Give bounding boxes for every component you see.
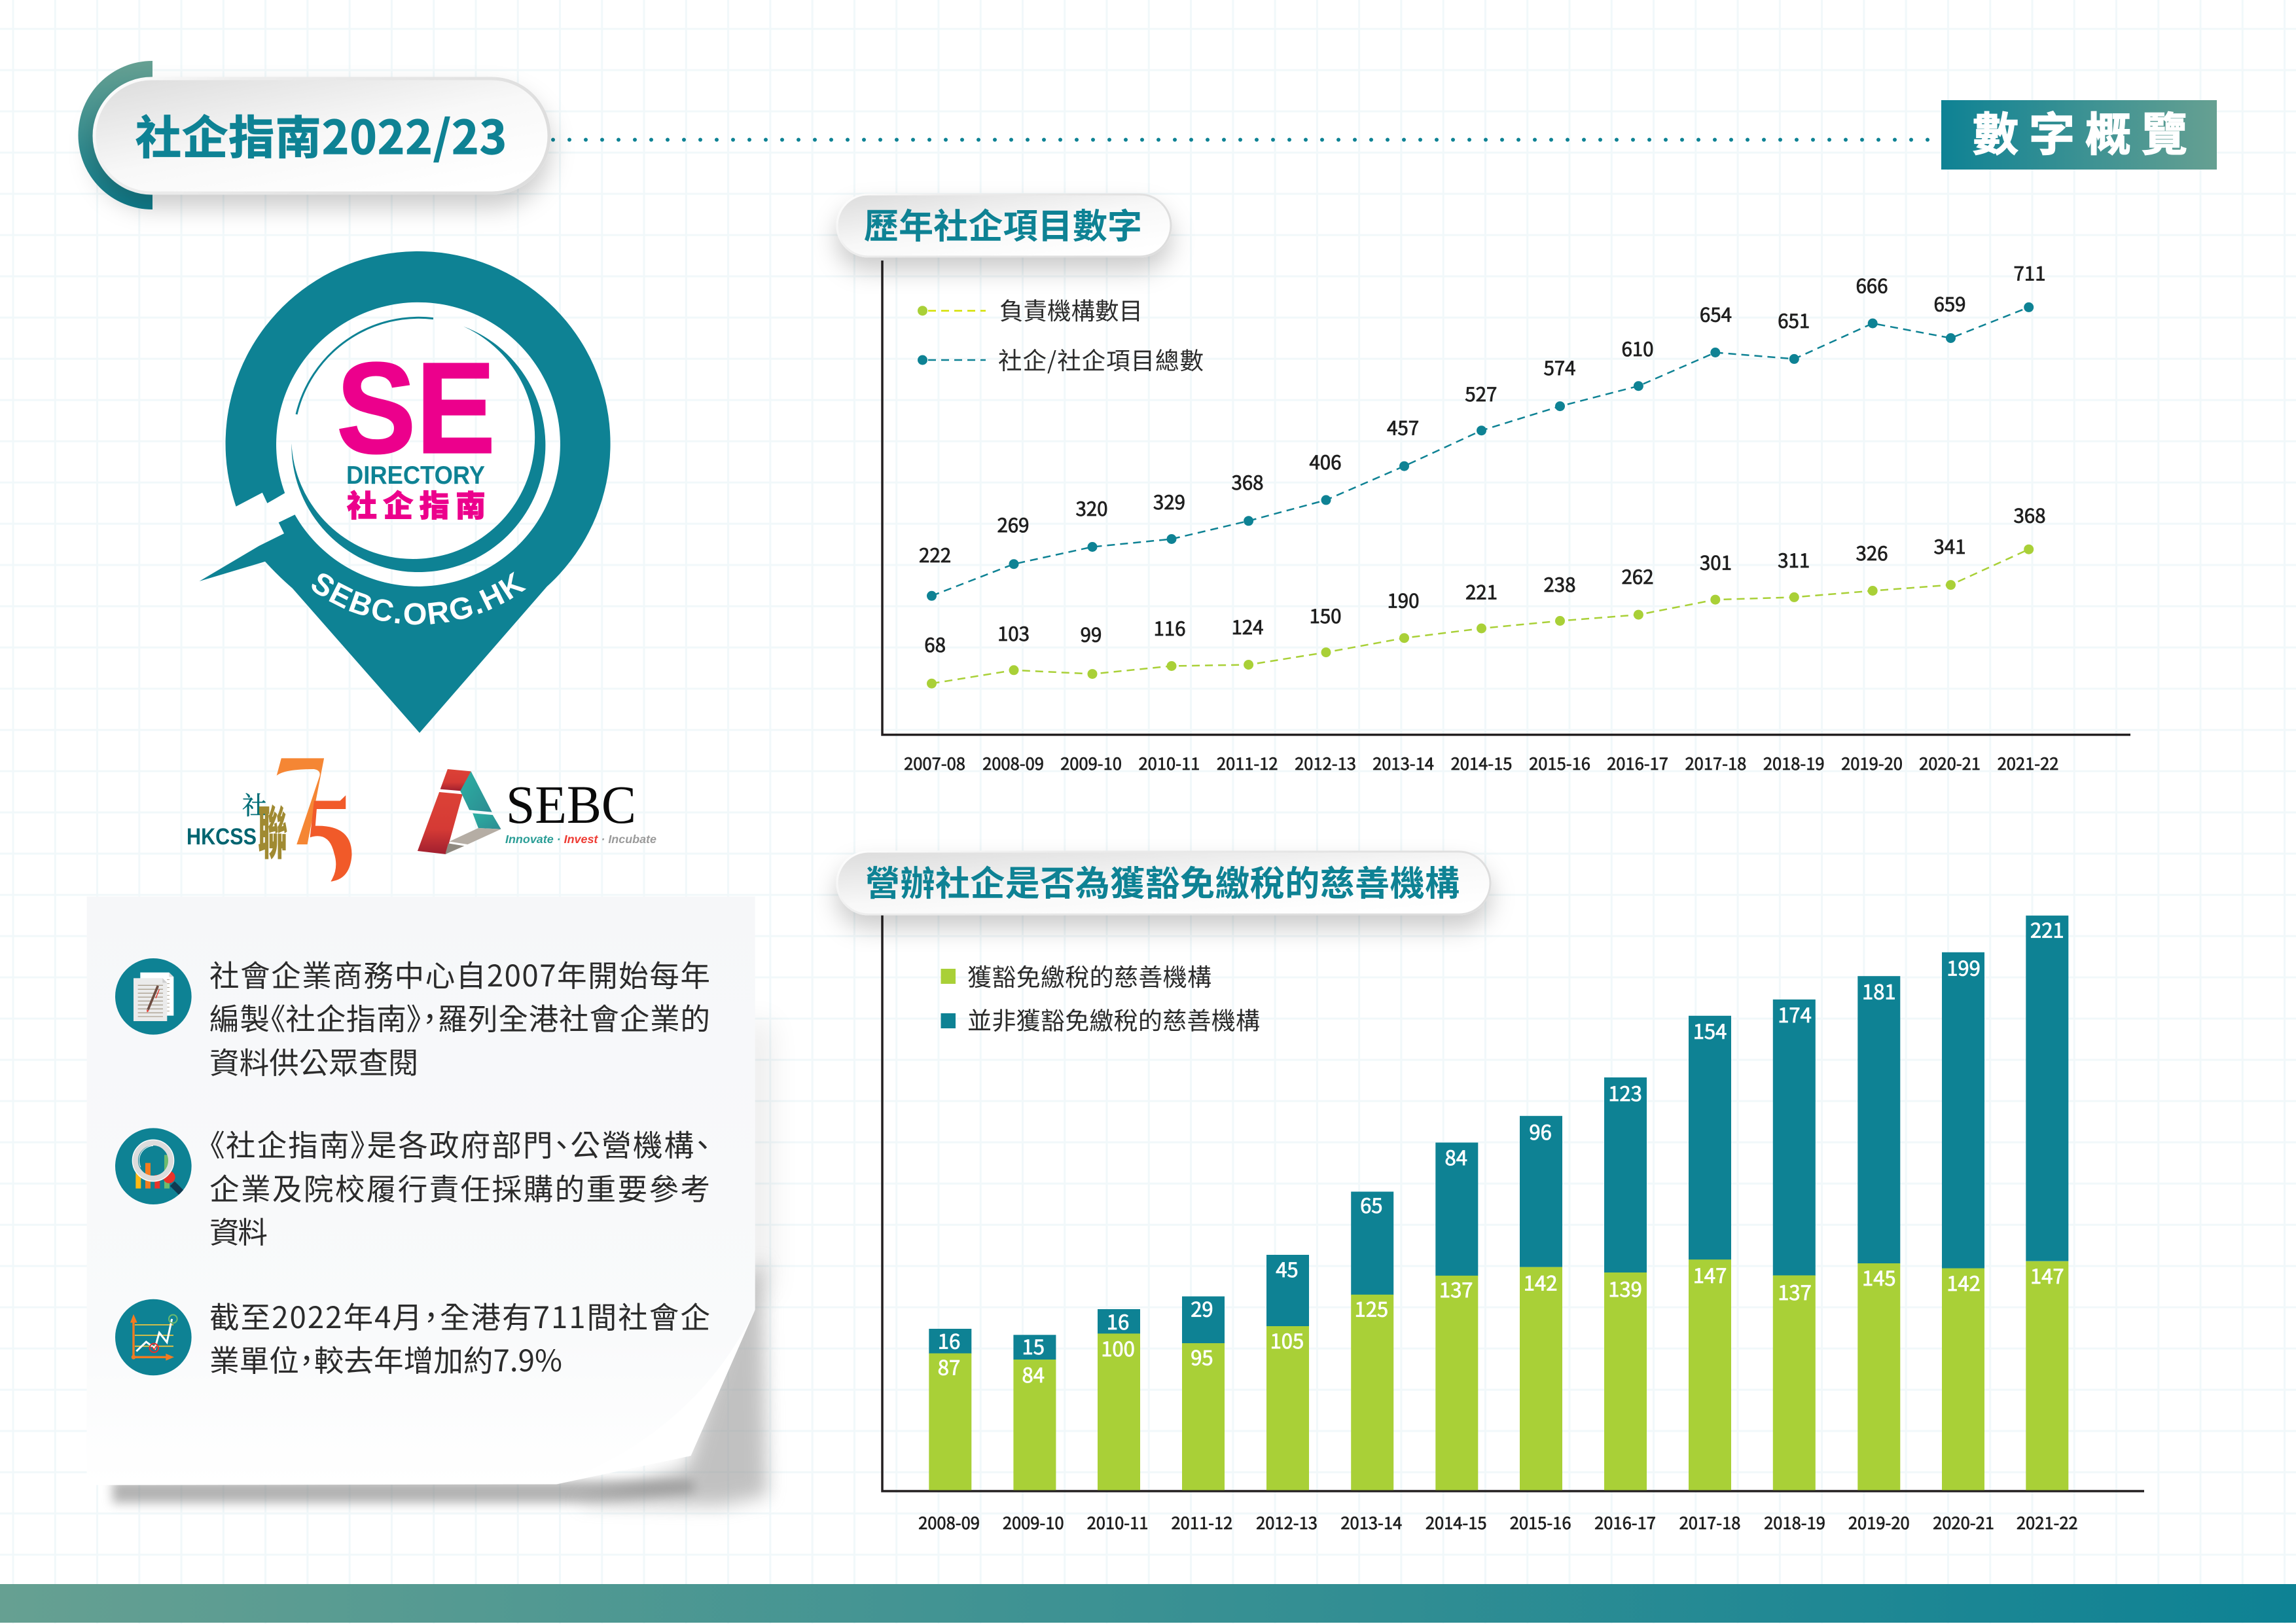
value labels: organisations: 190 <box>1387 586 1420 614</box>
value labels: total: 269 <box>997 511 1030 538</box>
value labels: total: 654 <box>1700 300 1732 327</box>
legend: 並非獲豁免繳稅的慈善機構 <box>967 1001 1260 1037</box>
bar value labels: non-exempt: 96 <box>1529 1116 1552 1146</box>
value labels: organisations: 124 <box>1231 613 1264 640</box>
bar value labels: exempt: 137 <box>1439 1274 1473 1303</box>
value labels: organisations: 116 <box>1153 614 1186 641</box>
bar value labels: non-exempt: 221 <box>2030 914 2064 944</box>
x axis year labels: 2010-11 <box>1139 751 1200 775</box>
value labels: organisations: 326 <box>1856 539 1888 566</box>
x axis year labels <box>904 751 2058 775</box>
stacked bar chart panel <box>837 852 2144 1534</box>
value labels: total: 666 <box>1856 271 1888 298</box>
series: responsible organisations <box>927 545 2034 689</box>
bar value labels: exempt: 100 <box>1101 1333 1135 1362</box>
bar chart heading pill: 營辦社企是否為獲豁免繳稅的慈善機構 <box>865 856 1460 906</box>
bar value labels: non-exempt: 45 <box>1276 1254 1299 1283</box>
bar value labels: non-exempt: 15 <box>1022 1331 1045 1360</box>
x axis year labels: 2016-17 <box>1607 751 1668 775</box>
bar value labels: exempt: 139 <box>1608 1273 1642 1303</box>
x axis year labels: 2013-14 <box>1372 751 1434 775</box>
value labels: total: 222 <box>919 541 951 568</box>
x axis year labels: 2020-21 <box>1919 751 1981 775</box>
paper shadow <box>113 1021 772 1506</box>
x axis year labels: 2008-09 <box>918 1510 980 1534</box>
value labels: organisations <box>924 501 2046 658</box>
bar value labels: exempt: 84 <box>1022 1359 1045 1388</box>
x axis year labels: 2015-16 <box>1529 751 1590 775</box>
bar value labels: non-exempt <box>938 914 2064 1360</box>
numeral 7 <box>277 758 324 844</box>
text: procurement paragraph: 《社企指南》是各政府部門、公營機構、 <box>209 1122 710 1165</box>
x axis year labels <box>918 1510 2078 1534</box>
bar value labels: non-exempt: 16 <box>1107 1306 1129 1335</box>
SE letters: SE <box>336 336 495 480</box>
x axis year labels: 2008-09 <box>982 751 1044 775</box>
bar value labels: exempt: 142 <box>1524 1267 1557 1296</box>
header dotted connector line <box>553 137 1941 141</box>
series: total social enterprises <box>927 302 2034 601</box>
x axis year labels: 2015-16 <box>1510 1510 1571 1534</box>
x axis year labels: 2017-18 <box>1679 1510 1740 1534</box>
text: intro paragraph: 編製《社企指南》，羅列全港社會企業的 <box>209 996 710 1039</box>
value labels: total: 711 <box>2013 259 2046 287</box>
x axis year labels: 2009-10 <box>1060 751 1122 775</box>
legend: 社企/社企項目總數 <box>998 342 1204 376</box>
bar value labels: exempt <box>938 1259 2064 1388</box>
x axis year labels: 2018-19 <box>1764 1510 1825 1534</box>
bar value labels: non-exempt: 123 <box>1608 1077 1642 1107</box>
x axis year labels: 2018-19 <box>1763 751 1825 775</box>
panel: paper note with curled corner <box>87 897 772 1506</box>
inner crescent ring <box>291 327 545 572</box>
x axis year labels: 2017-18 <box>1685 751 1746 775</box>
x axis year labels: 2019-20 <box>1841 751 1903 775</box>
value labels: organisations: 68 <box>924 630 946 658</box>
value labels: total: 320 <box>1075 494 1108 522</box>
text: procurement paragraph: 資料 <box>209 1209 268 1252</box>
paper sheet <box>87 897 755 1485</box>
thin arc <box>296 317 433 414</box>
SEBC wordmark: SEBC <box>506 774 636 835</box>
value labels: organisations: 99 <box>1081 620 1102 647</box>
bar value labels: non-exempt: 29 <box>1191 1293 1213 1322</box>
bar value labels: non-exempt: 174 <box>1778 999 1812 1028</box>
SEBC logo <box>418 769 656 854</box>
社企指南 text: 社企指南 <box>347 482 486 526</box>
value labels: total: 368 <box>1231 468 1264 496</box>
curled flap <box>556 1310 755 1485</box>
title text: 社企指南2022/23 <box>135 101 507 168</box>
bar value labels: non-exempt: 181 <box>1862 975 1896 1005</box>
text: 711 units paragraph: 截至2022年4月，全港有711間社會企 <box>209 1294 710 1337</box>
bar value labels: non-exempt: 84 <box>1444 1142 1467 1171</box>
bar chart axes <box>882 914 2144 1491</box>
x axis year labels: 2019-20 <box>1848 1510 1910 1534</box>
x axis year labels: 2014-15 <box>1451 751 1512 775</box>
社 glyph: 社 <box>242 785 267 821</box>
text: intro paragraph <box>209 952 710 1083</box>
bar value labels: exempt: 147 <box>1693 1259 1727 1289</box>
footer gradient band <box>0 1584 2296 1623</box>
value labels: total <box>919 259 2046 568</box>
bar value labels: non-exempt: 65 <box>1360 1189 1383 1219</box>
value labels: organisations: 368 <box>2013 501 2046 528</box>
bars: tax-exempt charities <box>929 1259 2068 1490</box>
value labels: organisations: 103 <box>997 619 1030 647</box>
x axis year labels: 2011-12 <box>1172 1510 1232 1534</box>
SE Directory pin logo <box>199 251 611 733</box>
x axis year labels: 2013-14 <box>1340 1510 1402 1534</box>
bar value labels: non-exempt: 154 <box>1693 1015 1727 1045</box>
x axis year labels: 2009-10 <box>1003 1510 1064 1534</box>
x axis year labels: 2010-11 <box>1087 1510 1148 1534</box>
line chart heading pill <box>837 194 1171 257</box>
icon: magnifier over bars <box>115 1128 192 1204</box>
value labels: organisations: 262 <box>1621 562 1654 590</box>
title pill background <box>94 79 549 193</box>
bar value labels: exempt: 142 <box>1946 1267 1981 1297</box>
HKCSS 75 logo <box>187 758 351 882</box>
pin body <box>199 251 611 733</box>
text: intro paragraph: 社會企業商務中心自2007年開始每年 <box>209 952 710 996</box>
x axis year labels: 2011-12 <box>1217 751 1278 775</box>
DIRECTORY text: DIRECTORY <box>346 461 485 490</box>
numeral 5 <box>310 795 351 882</box>
bar value labels: non-exempt: 16 <box>938 1325 960 1355</box>
value labels: total: 659 <box>1933 290 1966 317</box>
value labels: total: 574 <box>1543 353 1576 381</box>
bar value labels: exempt: 105 <box>1270 1325 1304 1354</box>
x axis year labels: 2012-13 <box>1256 1510 1318 1534</box>
x axis year labels: 2012-13 <box>1295 751 1356 775</box>
value labels: organisations: 311 <box>1778 546 1810 573</box>
bar value labels: exempt: 147 <box>2030 1260 2064 1290</box>
value labels: organisations: 221 <box>1465 578 1498 605</box>
value labels: total: 457 <box>1387 414 1419 441</box>
text: intro paragraph: 資料供公眾查閱 <box>209 1039 418 1083</box>
section tag: 數字概覽: 數字概覽 <box>1973 98 2187 164</box>
x axis year labels: 2020-21 <box>1933 1510 1994 1534</box>
text: 711 units paragraph <box>209 1294 710 1380</box>
legend <box>941 958 1260 1037</box>
bar value labels: exempt: 95 <box>1191 1342 1213 1371</box>
line chart axes <box>882 261 2130 734</box>
value labels: total: 329 <box>1153 488 1185 515</box>
title pill <box>78 61 549 209</box>
value labels: total: 527 <box>1465 380 1497 407</box>
bar value labels: exempt: 125 <box>1354 1293 1388 1322</box>
legend: 獲豁免繳稅的慈善機構 <box>967 958 1211 993</box>
bar value labels: exempt: 145 <box>1862 1262 1896 1291</box>
bars: non-exempt charities <box>929 916 2068 1360</box>
text: procurement paragraph: 企業及院校履行責任採購的重要參考 <box>209 1166 710 1209</box>
title crescent accent <box>78 61 152 209</box>
line chart heading pill: 歷年社企項目數字 <box>864 199 1142 249</box>
value labels: organisations: 341 <box>1933 532 1966 560</box>
SEBC.ORG.HK curved text: SEBC.ORG.HK <box>312 571 526 624</box>
icon: documents <box>115 958 192 1035</box>
bar value labels: non-exempt: 199 <box>1946 952 1981 982</box>
value labels: total: 610 <box>1621 334 1654 362</box>
icon: growth chart <box>115 1299 192 1375</box>
bar value labels: exempt: 87 <box>938 1351 960 1381</box>
value labels: organisations: 150 <box>1309 602 1342 629</box>
tagline: Innovate · Invest · Incubate <box>505 833 656 846</box>
triangle mark <box>418 769 501 854</box>
x axis year labels: 2014-15 <box>1426 1510 1487 1534</box>
x axis year labels: 2021-22 <box>2017 1510 2078 1534</box>
text: 711 units paragraph: 業單位，較去年增加約7.9% <box>209 1337 562 1380</box>
x axis year labels: 2016-17 <box>1594 1510 1656 1534</box>
value labels: organisations: 238 <box>1543 570 1576 598</box>
value labels: total: 406 <box>1309 448 1342 475</box>
聯 glyph: 聯 <box>258 787 287 871</box>
value labels: total: 651 <box>1778 306 1810 334</box>
bar value labels: exempt: 137 <box>1778 1276 1812 1306</box>
x axis year labels: 2021-22 <box>1998 751 2058 775</box>
HKCSS wordmark: HKCSS <box>187 824 257 850</box>
x axis year labels: 2007-08 <box>904 751 965 775</box>
line chart panel <box>837 194 2130 775</box>
text: procurement paragraph <box>209 1122 710 1252</box>
legend: 負責機構數目 <box>999 292 1143 327</box>
legend <box>918 292 1204 376</box>
value labels: organisations: 301 <box>1700 549 1732 576</box>
